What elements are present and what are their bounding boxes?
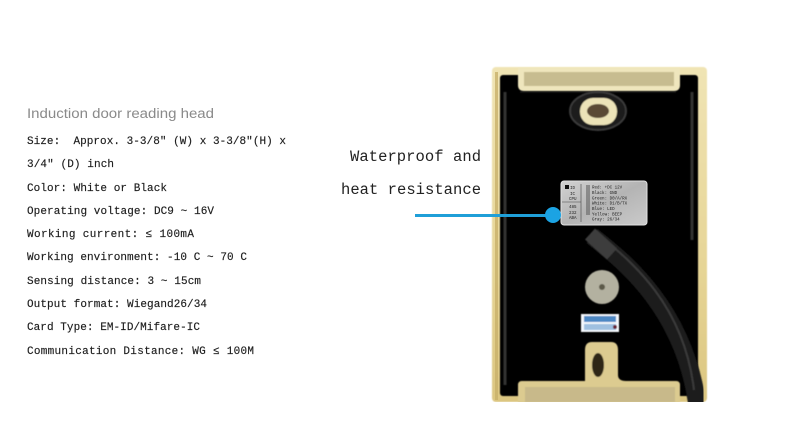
size continued: 3/4" (D) inch bbox=[27, 159, 114, 171]
spec label plate: Green: D0/A/RX bbox=[592, 196, 628, 202]
spec label plate: ABA bbox=[569, 217, 577, 221]
top screw hole bbox=[570, 92, 626, 130]
spec label plate: 485 bbox=[569, 206, 577, 210]
spec label plate: Red: +DC 12V bbox=[592, 186, 623, 190]
top mounting tab bbox=[518, 68, 680, 91]
spec label plate: IC bbox=[570, 193, 576, 197]
case left darker edge bbox=[495, 72, 498, 400]
sensing distance: Sensing distance: 3 ~ 15cm bbox=[27, 276, 201, 288]
case body bbox=[492, 67, 707, 402]
spec label plate: CPU bbox=[569, 198, 577, 202]
interior gloss edges bbox=[505, 92, 692, 385]
black interior bbox=[500, 75, 698, 396]
spec label plate: 232 bbox=[569, 212, 577, 216]
spec label plate: White: D1/B/TX bbox=[592, 202, 628, 206]
callout: waterproof and heat resistance: heat resistance bbox=[341, 181, 481, 199]
spec label plate: ID bbox=[570, 187, 576, 191]
heading: Induction door reading head bbox=[27, 106, 214, 121]
color: Color: White or Black bbox=[27, 183, 167, 195]
blue sticker bbox=[581, 314, 619, 332]
communication distance: Communication Distance: WG ≤ 100M bbox=[27, 346, 254, 358]
working environment: Working environment: -10 C ~ 70 C bbox=[27, 252, 247, 264]
round tamper disc bbox=[585, 270, 619, 304]
specifications list bbox=[27, 136, 286, 358]
spec label plate: Black: GND bbox=[592, 191, 618, 196]
photo: reader back case bbox=[492, 67, 707, 410]
arrow: callout pointer bbox=[415, 207, 561, 223]
spec label plate: Yellow: BEEP bbox=[592, 212, 623, 218]
callout: waterproof and heat resistance: Waterproof and bbox=[350, 148, 481, 166]
working current: Working current: ≤ 100mA bbox=[27, 229, 194, 241]
spec label plate: Blue: LED bbox=[592, 207, 615, 212]
spec label plate: Gray: 26/34 bbox=[592, 218, 620, 222]
size: Size: Approx. 3-3/8" (W) x 3-3/8"(H) x bbox=[27, 136, 286, 148]
spec label plate bbox=[561, 181, 647, 225]
cable bbox=[590, 234, 698, 410]
callout: waterproof and heat resistance bbox=[341, 148, 481, 199]
operating voltage: Operating voltage: DC9 ~ 16V bbox=[27, 206, 214, 218]
output format: Output format: Wiegand26/34 bbox=[27, 299, 207, 311]
card type: Card Type: EM-ID/Mifare-IC bbox=[27, 322, 200, 334]
bottom mounting tab bbox=[518, 342, 680, 403]
